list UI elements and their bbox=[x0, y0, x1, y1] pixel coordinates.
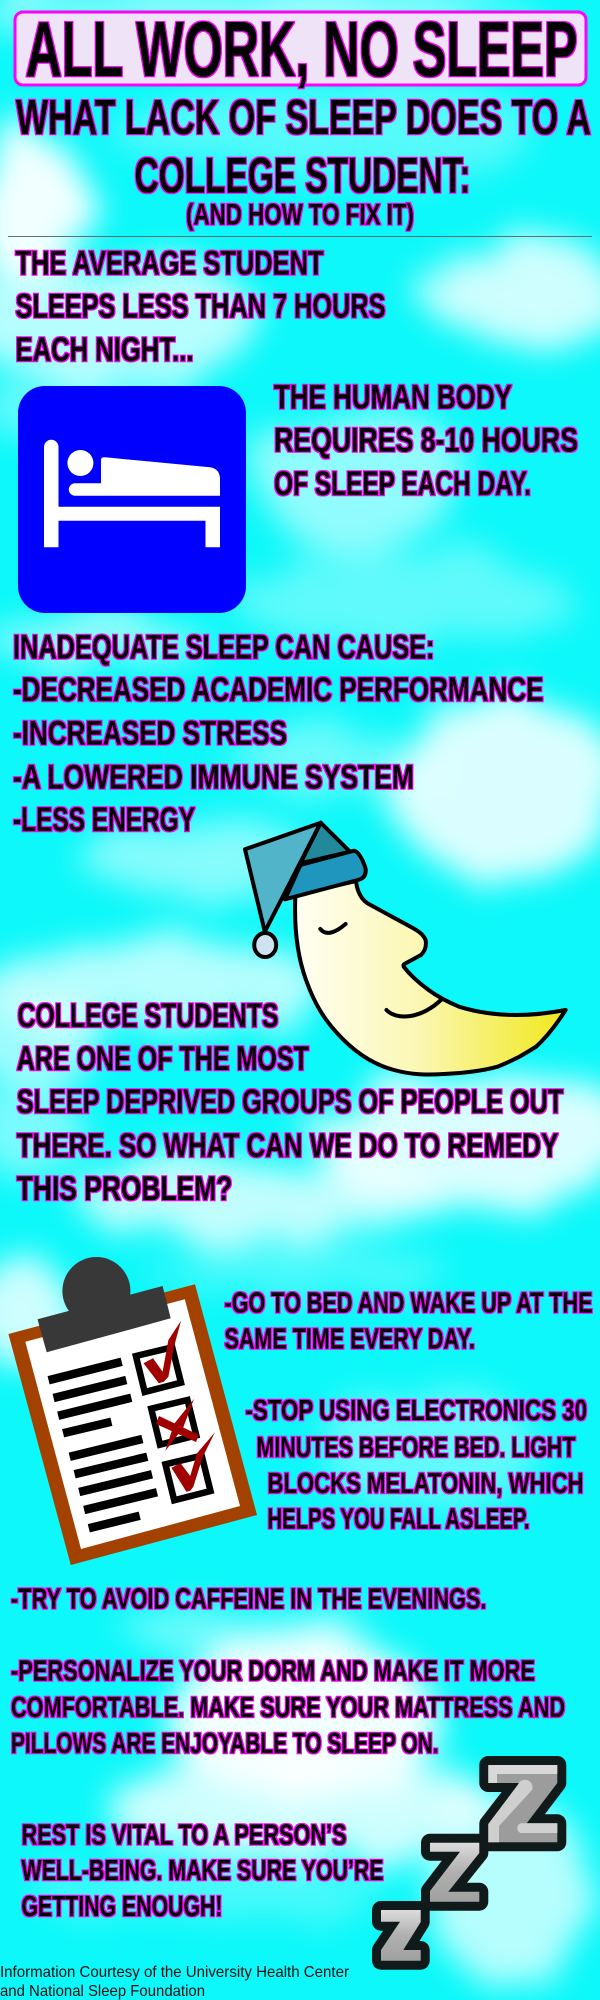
icon: clipboard checklist bbox=[8, 1257, 257, 1565]
icon: ZZZ letters bbox=[381, 1765, 557, 1961]
text: effects of inadequate sleep: -INCREASED STRESS bbox=[13, 714, 287, 752]
text: average student sleep: THE AVERAGE STUDENT bbox=[16, 244, 324, 282]
text: college students sleep deprived: THIS PROBLEM? bbox=[17, 1170, 232, 1208]
text: closing message: REST IS VITAL TO A PERSON’S bbox=[22, 1820, 346, 1852]
text: effects of inadequate sleep bbox=[13, 628, 544, 839]
subtitle: (AND HOW TO FIX IT) bbox=[186, 198, 414, 232]
text: sleep schedule tips bbox=[224, 1288, 592, 1536]
text: effects of inadequate sleep: INADEQUATE SLEEP CAN CAUSE: bbox=[13, 628, 434, 666]
text: average student sleep bbox=[16, 244, 386, 369]
text: college students sleep deprived bbox=[17, 997, 563, 1208]
footer: source credit: Information Courtesy of the University Health Center bbox=[0, 1964, 350, 1981]
text: sleep schedule tips: SAME TIME EVERY DAY. bbox=[224, 1324, 475, 1356]
text: human body needs bbox=[274, 378, 578, 503]
footer: source credit: and National Sleep Foundation bbox=[0, 1983, 205, 2000]
text: caffeine and dorm tips bbox=[11, 1584, 565, 1760]
text: effects of inadequate sleep: -A LOWERED IMMUNE SYSTEM bbox=[13, 758, 414, 796]
text: human body needs: THE HUMAN BODY bbox=[274, 378, 512, 416]
text: average student sleep: EACH NIGHT... bbox=[16, 331, 194, 369]
footer: source credit bbox=[0, 1964, 350, 2000]
text: closing message: WELL-BEING. MAKE SURE YOU’RE bbox=[22, 1855, 384, 1887]
text: effects of inadequate sleep: -LESS ENERGY bbox=[13, 801, 195, 839]
subtitle bbox=[16, 91, 591, 232]
text: college students sleep deprived: COLLEGE STUDENTS bbox=[18, 997, 278, 1035]
icon: blue bed sign bbox=[18, 386, 246, 613]
text: closing message bbox=[22, 1820, 384, 1923]
text: closing message: GETTING ENOUGH! bbox=[22, 1891, 222, 1923]
text: average student sleep: SLEEPS LESS THAN 7 HOURS bbox=[16, 288, 386, 326]
text: college students sleep deprived: ARE ONE OF THE MOST bbox=[17, 1040, 309, 1078]
icon: moon with nightcap bbox=[245, 823, 566, 1075]
text: caffeine and dorm tips: PILLOWS ARE ENJOYABLE TO SLEEP ON. bbox=[11, 1728, 438, 1760]
